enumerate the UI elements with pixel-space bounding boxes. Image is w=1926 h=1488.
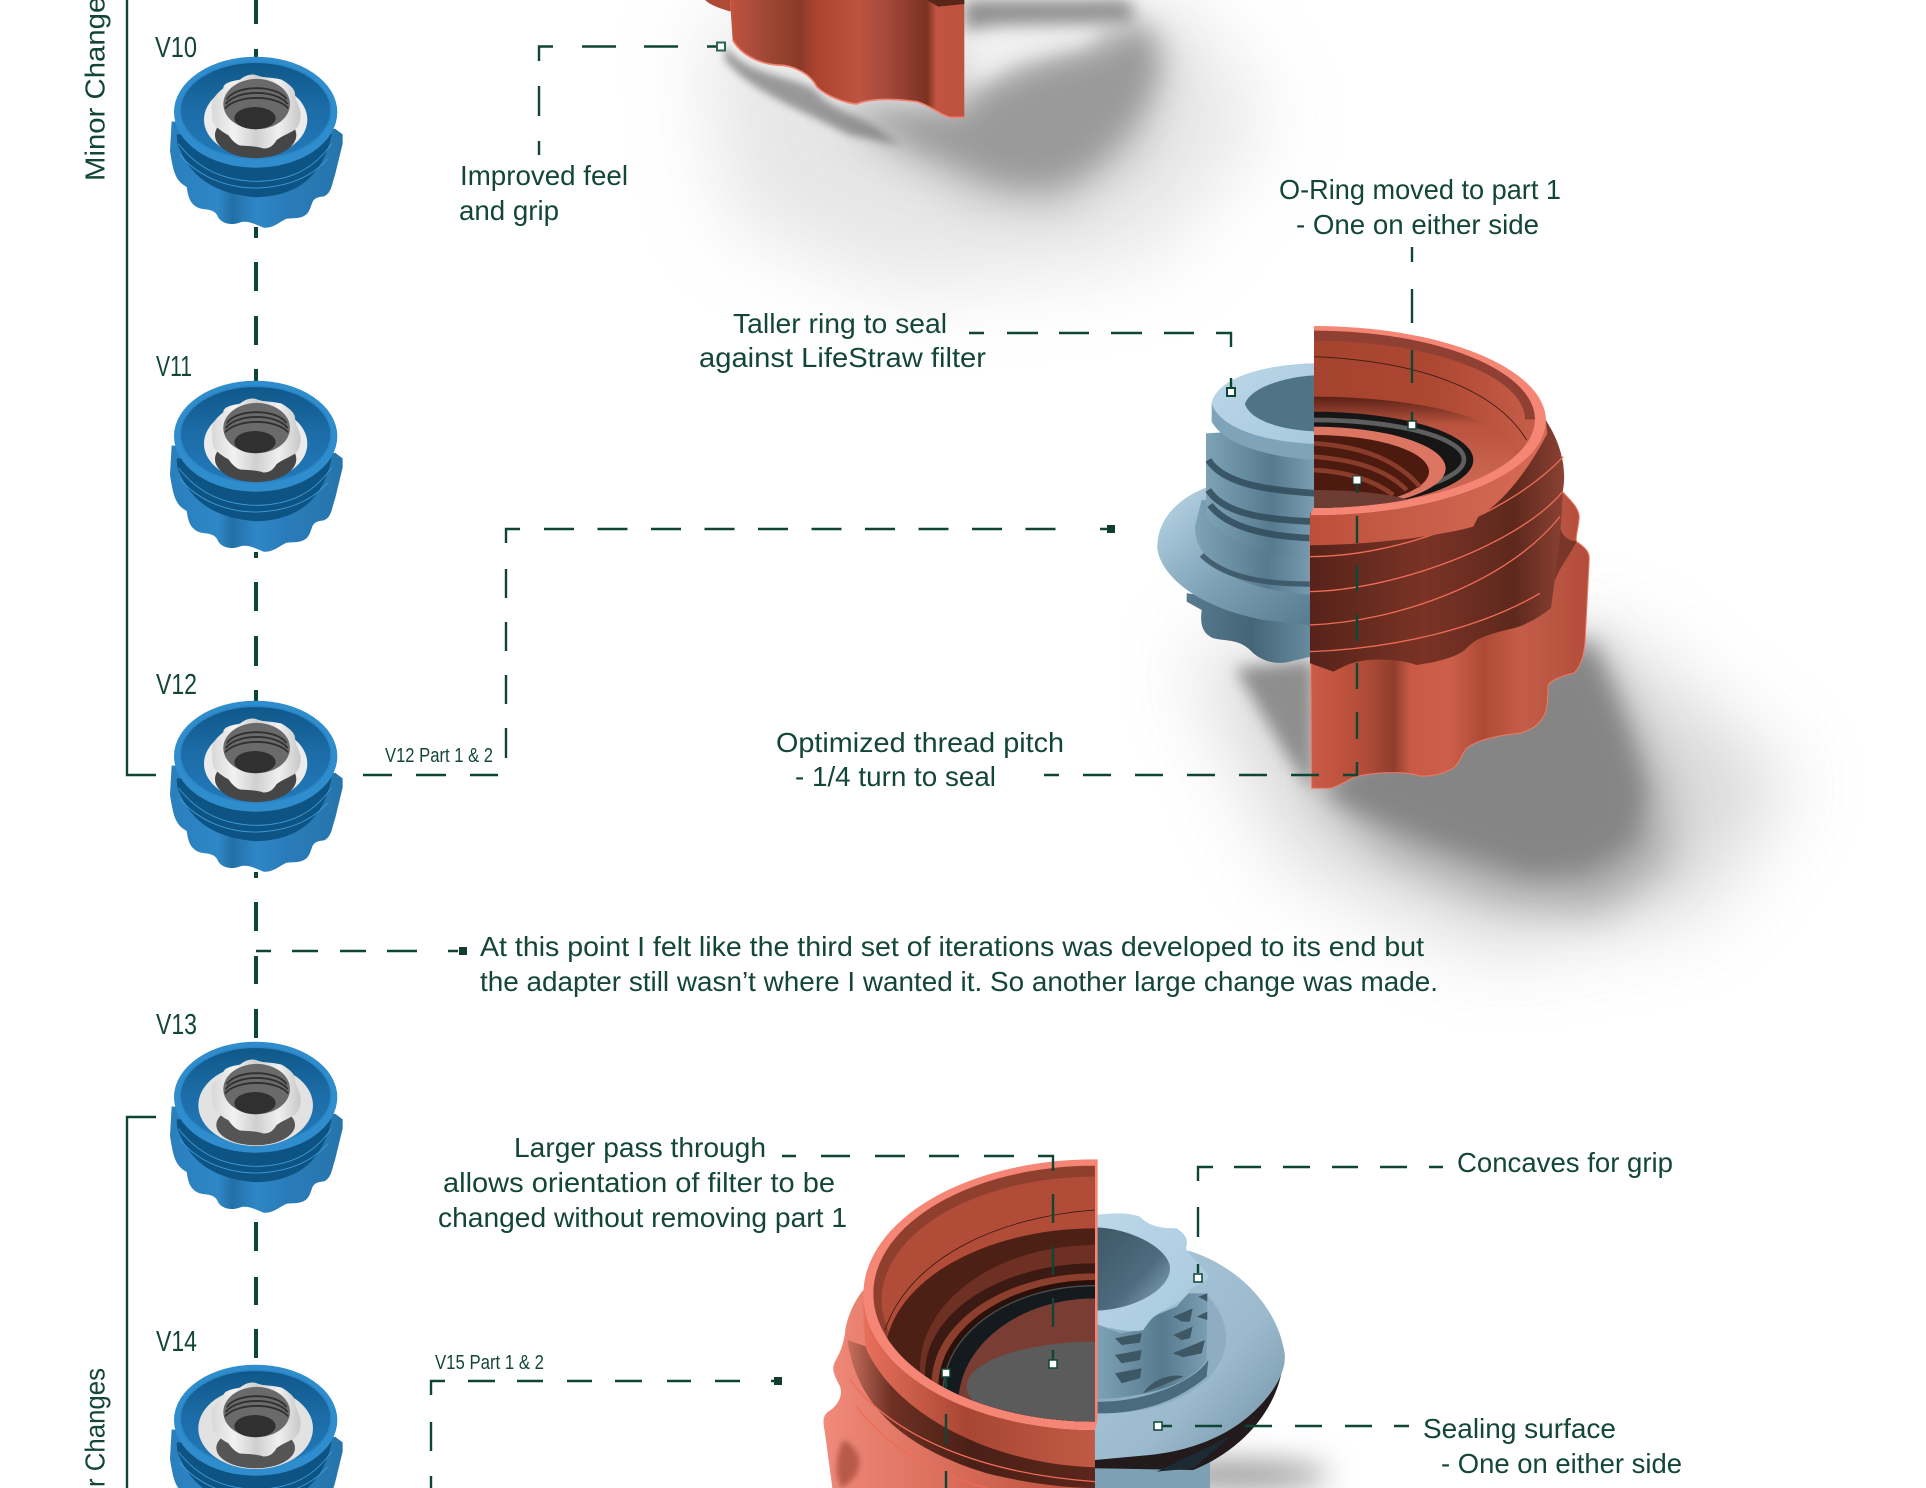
callout: improved feel and grip: Improved feel xyxy=(460,160,628,191)
callout: larger pass through: Larger pass through xyxy=(514,1132,766,1163)
version V11 xyxy=(156,351,343,552)
red thread band xyxy=(847,1340,1095,1488)
callout: sealing surface: Sealing surface xyxy=(1423,1413,1616,1444)
interior xyxy=(873,1166,1095,1422)
callout: sealing surface xyxy=(1154,1413,1682,1479)
version V13 xyxy=(156,1009,343,1213)
callout: sealing surface: - One on either side xyxy=(1441,1448,1682,1479)
version V12: V12 xyxy=(156,669,197,701)
section render: top cropped part xyxy=(705,0,964,117)
callout: optimized thread pitch: Optimized thread pitch xyxy=(776,727,1064,758)
callout: o-ring moved to part 1 xyxy=(1279,174,1561,429)
bracket: major changes xyxy=(127,1117,156,1488)
callout: larger pass through: allows orientation of filter to be xyxy=(443,1167,835,1198)
bracket: minor changes xyxy=(127,0,156,775)
version V13: V13 xyxy=(156,1009,197,1041)
version V14 xyxy=(156,1326,343,1488)
version V14: V14 xyxy=(156,1326,197,1358)
callout: concaves for grip xyxy=(1194,1147,1673,1282)
callout: improved feel and grip: and grip xyxy=(459,195,559,226)
callout: larger pass through xyxy=(438,1132,1057,1368)
callout: optimized thread pitch: - 1/4 turn to seal xyxy=(795,761,996,792)
version V12 xyxy=(156,669,343,872)
callout: optimized thread pitch xyxy=(776,476,1361,792)
version V10 xyxy=(155,32,343,228)
red rim lip xyxy=(1310,326,1546,515)
callout: taller ring to seal xyxy=(699,308,1235,396)
blue half xyxy=(1157,363,1315,663)
callout: taller ring to seal: Taller ring to seal xyxy=(733,308,947,339)
note: third set of iterations: At this point I felt like the third set of iterations was developed to its end but xyxy=(480,931,1424,962)
label with leader: V15 part 1 and 2: V15 Part 1 & 2 xyxy=(435,1352,544,1374)
label with leader: V15 part 1 and 2 xyxy=(431,1352,782,1488)
section render: large V12 cutaway xyxy=(1114,326,1589,788)
soft shadow: large section view xyxy=(1190,640,1790,950)
interior xyxy=(1314,330,1535,508)
note: third set of iterations: the adapter still wasn’t where I wanted it. So another large change was made. xyxy=(480,966,1438,997)
version V10: V10 xyxy=(155,32,197,64)
label with leader: V12 part 1 and 2 xyxy=(363,525,1115,775)
callout: concaves for grip: Concaves for grip xyxy=(1457,1147,1673,1178)
note: third set of iterations xyxy=(256,931,1438,997)
red rim lip xyxy=(863,1159,1098,1430)
timeline spine xyxy=(254,0,258,1358)
red body: thread band xyxy=(1310,421,1564,672)
red outer wall xyxy=(824,1290,1095,1488)
label with leader: V12 part 1 and 2: V12 Part 1 & 2 xyxy=(385,745,493,767)
callout: larger pass through: changed without removing part 1 xyxy=(438,1202,847,1233)
callout: taller ring to seal: against LifeStraw filter xyxy=(699,342,986,373)
callout: o-ring moved to part 1: O-Ring moved to part 1 xyxy=(1279,174,1561,205)
red rim front xyxy=(863,1295,1095,1467)
callout: improved feel and grip xyxy=(459,42,725,226)
callout: o-ring moved to part 1: - One on either side xyxy=(1296,209,1539,240)
leader: section marker to threads xyxy=(942,1369,950,1488)
side label: changes (cropped at bottom edge): r Changes xyxy=(80,1368,110,1487)
red body: knurled base xyxy=(1310,421,1589,788)
blue half xyxy=(1095,1213,1285,1488)
soft shadow: top part xyxy=(700,0,1270,290)
soft shadow: lower section view xyxy=(1140,1462,1330,1488)
red rim front xyxy=(1310,421,1547,545)
version V11: V11 xyxy=(156,351,192,383)
section render: lower V15 cutaway xyxy=(824,1159,1308,1488)
